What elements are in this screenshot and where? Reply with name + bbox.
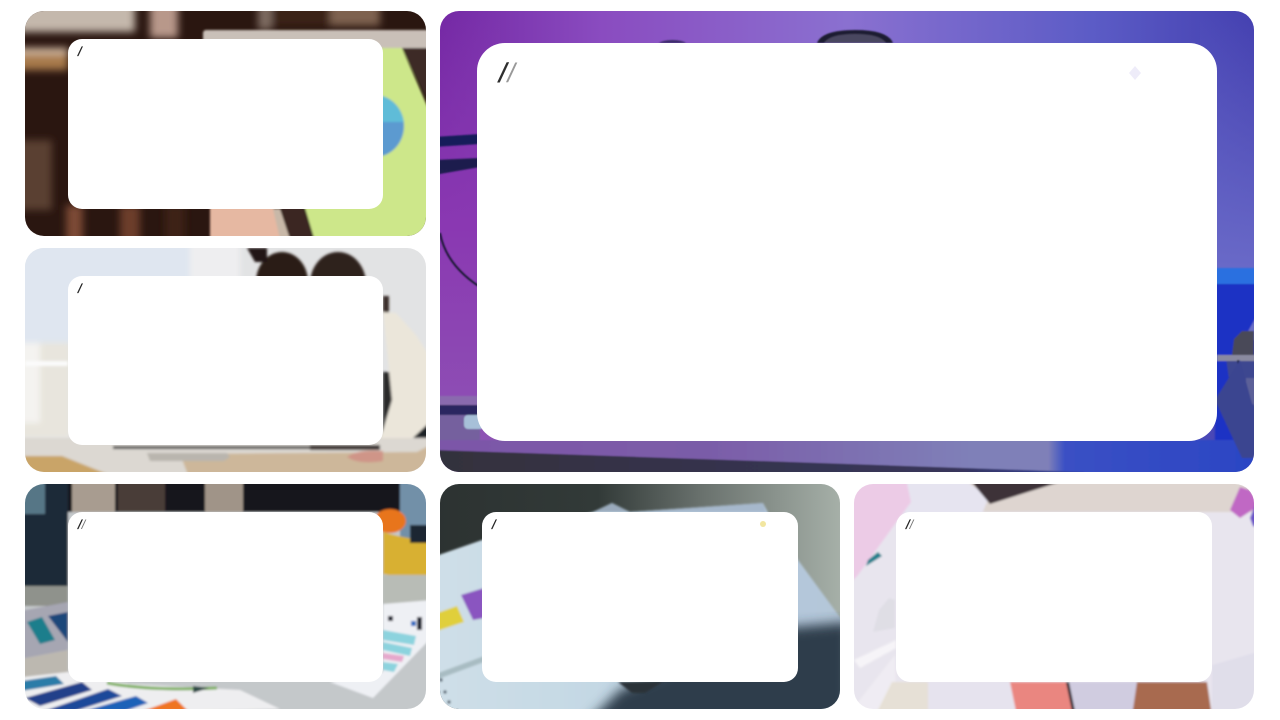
card: blank white card <box>68 39 383 209</box>
card: blank white card <box>482 512 798 682</box>
panel: office photo with pie chart on monitor <box>25 11 426 236</box>
icon: small yellow dot <box>760 521 766 527</box>
panel: color charts on table photo <box>25 484 426 709</box>
card: blank white card <box>68 276 383 445</box>
card: large blank white card <box>477 43 1217 441</box>
card: blank white card <box>68 512 383 682</box>
card: blank white card <box>896 512 1212 682</box>
panel: large purple and blue studio photo <box>440 11 1254 472</box>
slash mark: / <box>78 281 82 296</box>
icon: faint lavender diamond <box>1129 66 1141 80</box>
double slash mark: // <box>78 517 85 532</box>
panel: documents with color swatches photo <box>440 484 840 709</box>
double slash mark: // <box>499 58 516 88</box>
panel: pastel desk with papers photo <box>854 484 1254 709</box>
panel: two women at a desk photo <box>25 248 426 472</box>
slash mark: / <box>492 517 496 532</box>
double slash mark: // <box>906 517 913 532</box>
slash mark: / <box>78 44 82 59</box>
